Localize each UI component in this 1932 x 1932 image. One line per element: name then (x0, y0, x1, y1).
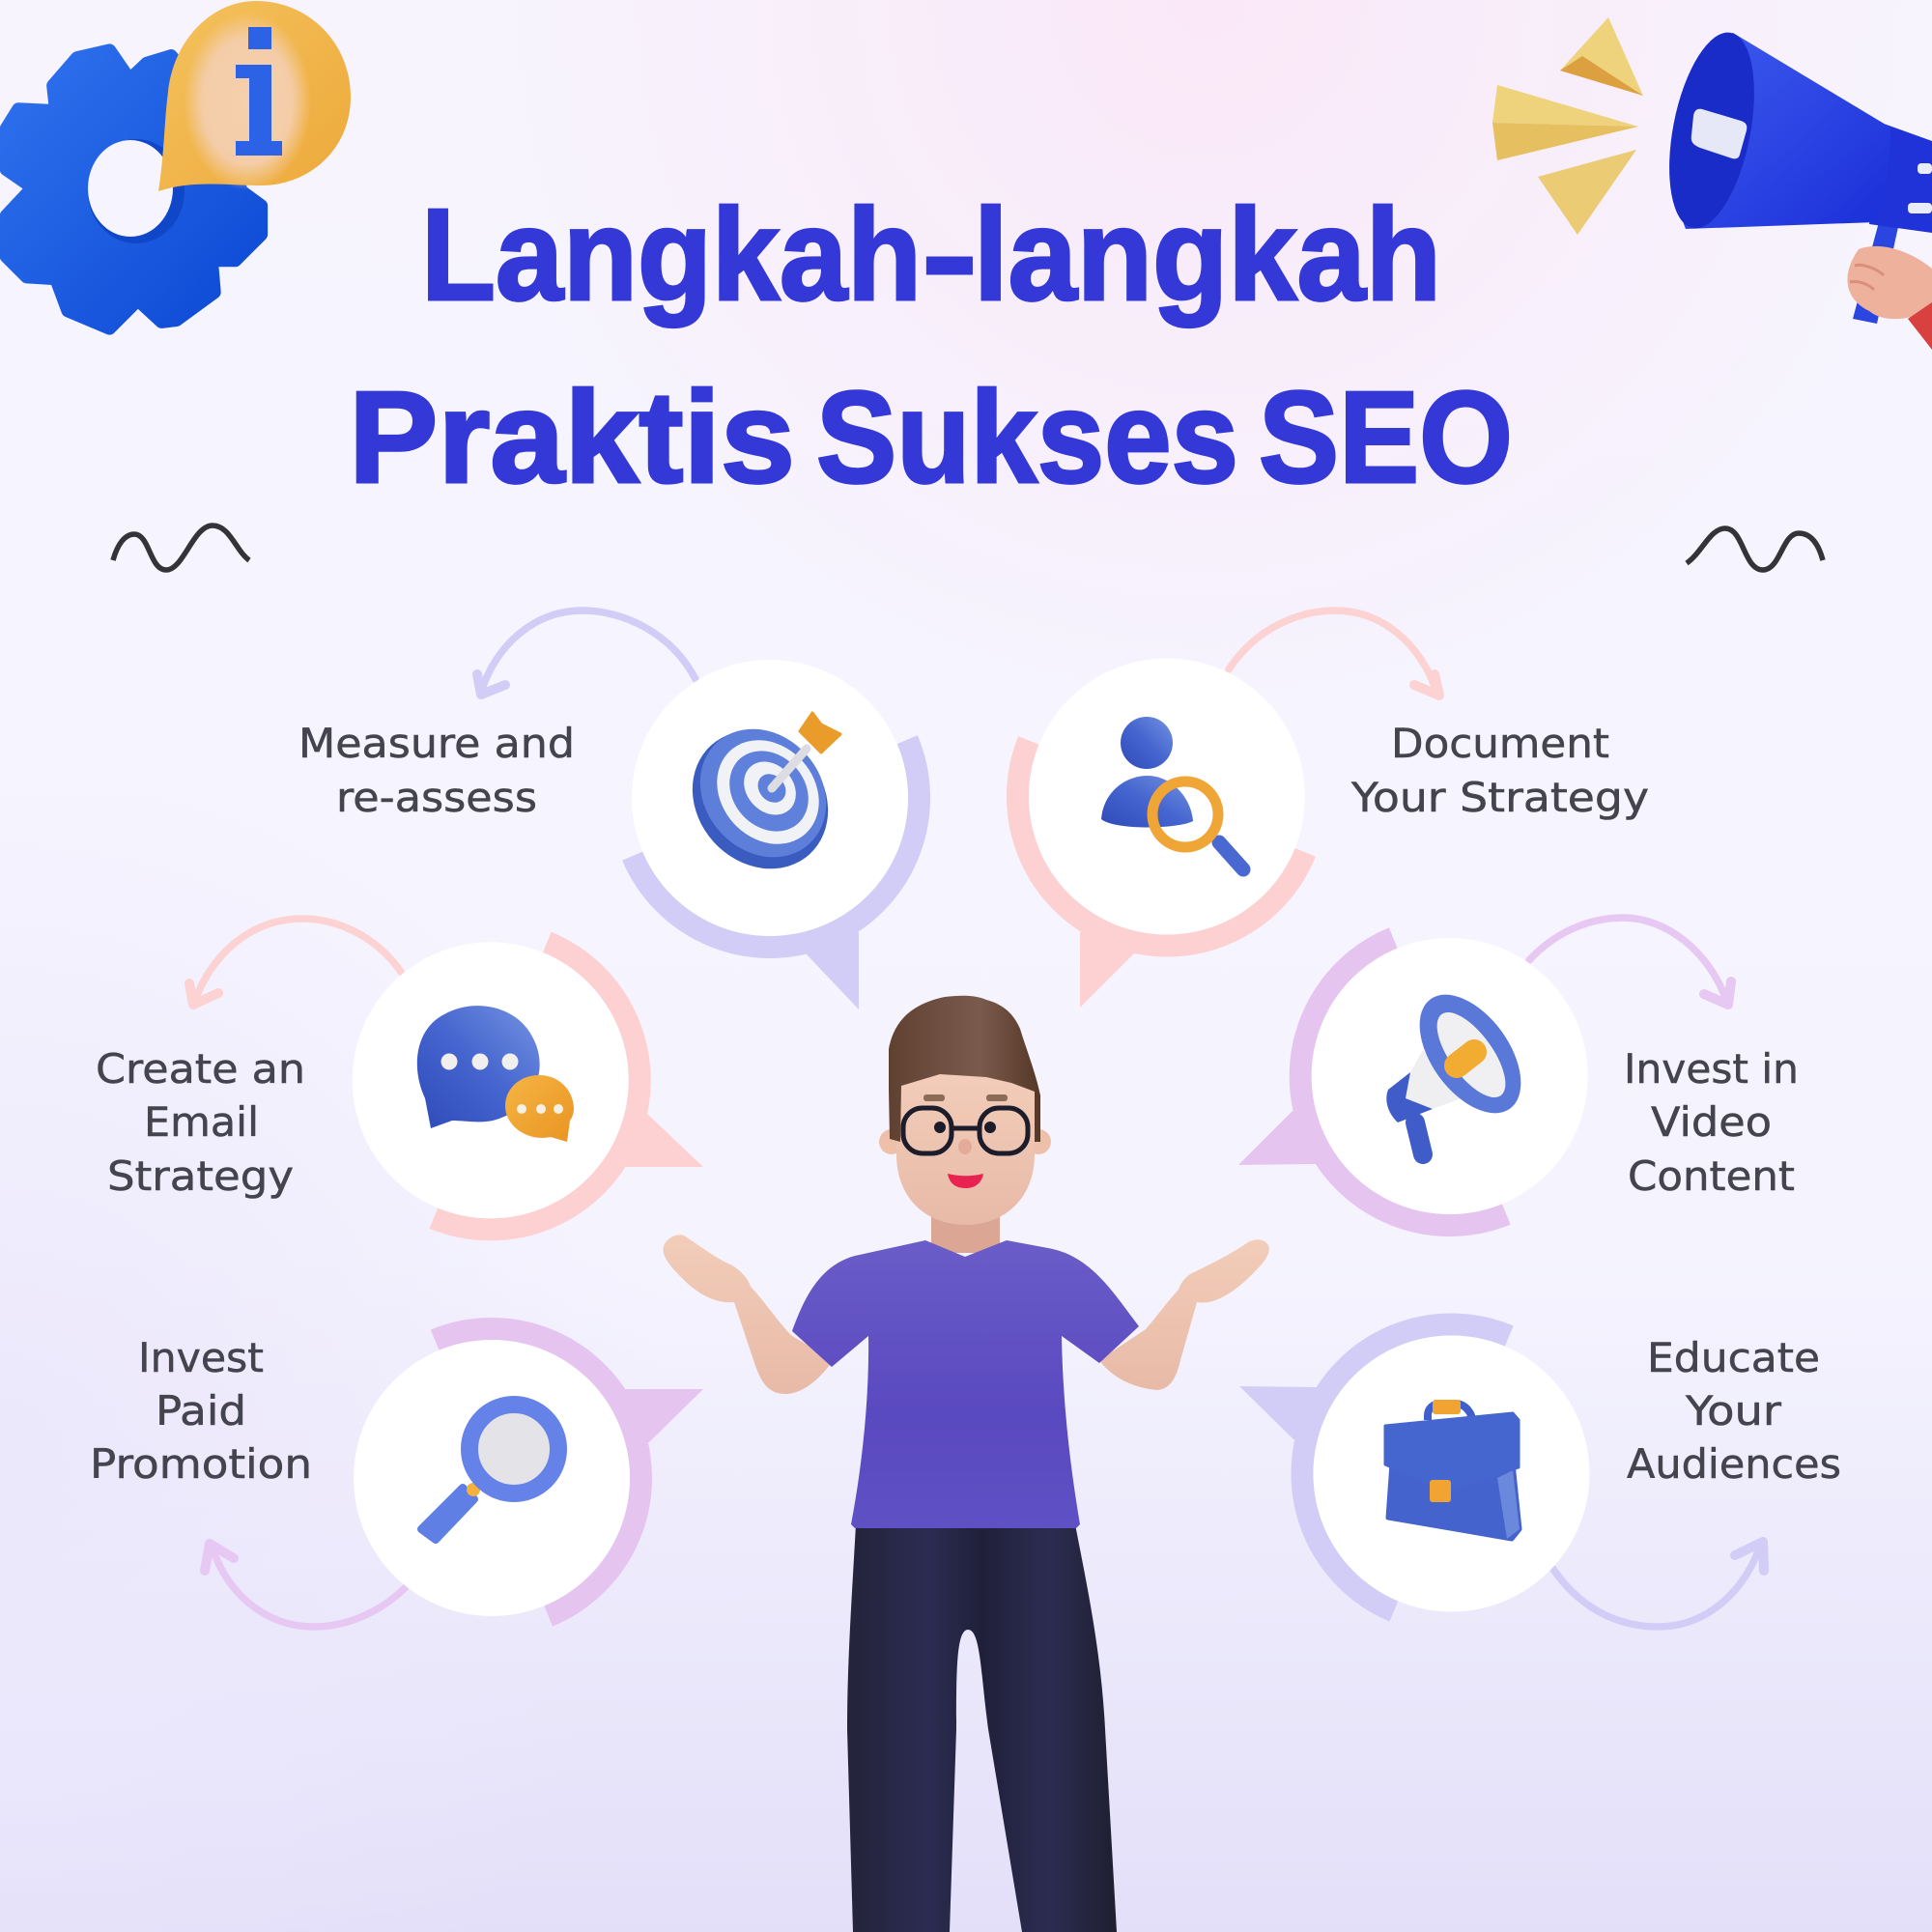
icon: magnifier (421, 1405, 558, 1540)
step: Measure and re-assess (298, 602, 966, 1009)
step: Document Your Strategy (973, 602, 1649, 1008)
title line 2: SEO (1259, 364, 1513, 510)
step: Invest Paid Promotion (90, 1283, 703, 1673)
bubble ring (1238, 881, 1644, 1271)
arrow (477, 611, 696, 695)
label: Email (144, 1098, 259, 1146)
step: Create an Email Strategy (96, 886, 703, 1275)
label: Video (1651, 1098, 1772, 1146)
circle (1029, 659, 1305, 935)
face (896, 1072, 1035, 1225)
title line 1 (421, 182, 1441, 327)
icon: briefcase (1385, 1400, 1520, 1539)
label: Audiences (1627, 1440, 1841, 1488)
label: Invest in (1624, 1045, 1799, 1093)
ears (879, 1129, 1051, 1154)
bubble ring (574, 602, 966, 1009)
icon: chat bubbles (417, 1006, 574, 1142)
label (90, 1334, 312, 1488)
label: Document (1391, 720, 1609, 767)
arrow (1529, 918, 1731, 1005)
title line 2: Praktis (349, 364, 795, 510)
label: Strategy (107, 1152, 294, 1200)
glasses (903, 1108, 1028, 1153)
eyebrows (923, 1094, 1008, 1101)
bubble ring (973, 602, 1361, 1008)
label: Create an (96, 1045, 305, 1093)
label (1624, 1045, 1799, 1200)
bubble ring (1239, 1278, 1647, 1669)
label: Your Strategy (1350, 774, 1649, 821)
icon: megaphone (1386, 977, 1542, 1154)
circle (354, 1340, 630, 1616)
arrow (189, 919, 401, 1005)
title (349, 182, 1513, 510)
icon: gear with info bubble (7, 1, 351, 327)
title line 2: Sukses (816, 364, 1238, 510)
label (298, 720, 575, 821)
title line 1: langkah (974, 182, 1441, 327)
label: re-assess (336, 774, 537, 821)
icon: target with arrow (665, 703, 856, 896)
neck (931, 1203, 1000, 1253)
eyes (934, 1122, 996, 1133)
icon: megaphone in hand (1655, 25, 1932, 350)
hair (889, 996, 1040, 1142)
label: Educate (1647, 1334, 1820, 1381)
label (1627, 1334, 1841, 1488)
arrow (1229, 611, 1439, 696)
label: Promotion (90, 1440, 312, 1488)
circle (353, 942, 629, 1218)
label: Paid (156, 1387, 246, 1435)
squiggle right (1687, 528, 1823, 570)
icon: person with magnifier (1101, 717, 1243, 869)
label (96, 1045, 305, 1200)
nose (958, 1139, 972, 1154)
label: Your (1685, 1387, 1782, 1435)
label: Content (1628, 1152, 1795, 1200)
step: Educate Your Audiences (1239, 1278, 1841, 1669)
label (1350, 720, 1649, 821)
label: Measure and (298, 720, 575, 767)
arrow (1552, 1542, 1764, 1627)
squiggle left (113, 526, 249, 570)
icon: yellow burst triangles (1492, 17, 1643, 235)
title line 1: Langkah (421, 182, 922, 327)
trousers (847, 1524, 1117, 1932)
shirt (792, 1240, 1139, 1528)
title line 2 (349, 364, 1513, 510)
bubble ring (297, 1283, 703, 1673)
circle (632, 660, 908, 936)
circle (1312, 938, 1588, 1214)
mouth (948, 1174, 983, 1188)
step: Invest in Video Content (1238, 881, 1799, 1271)
title line 1: - (922, 182, 978, 327)
left arm and hand (663, 1235, 834, 1394)
character: man shrugging (663, 996, 1269, 1932)
circle (1314, 1335, 1590, 1611)
bubble ring (296, 886, 703, 1275)
label: Invest (138, 1334, 264, 1381)
arrow (205, 1544, 406, 1627)
right arm and hand (1099, 1239, 1269, 1390)
